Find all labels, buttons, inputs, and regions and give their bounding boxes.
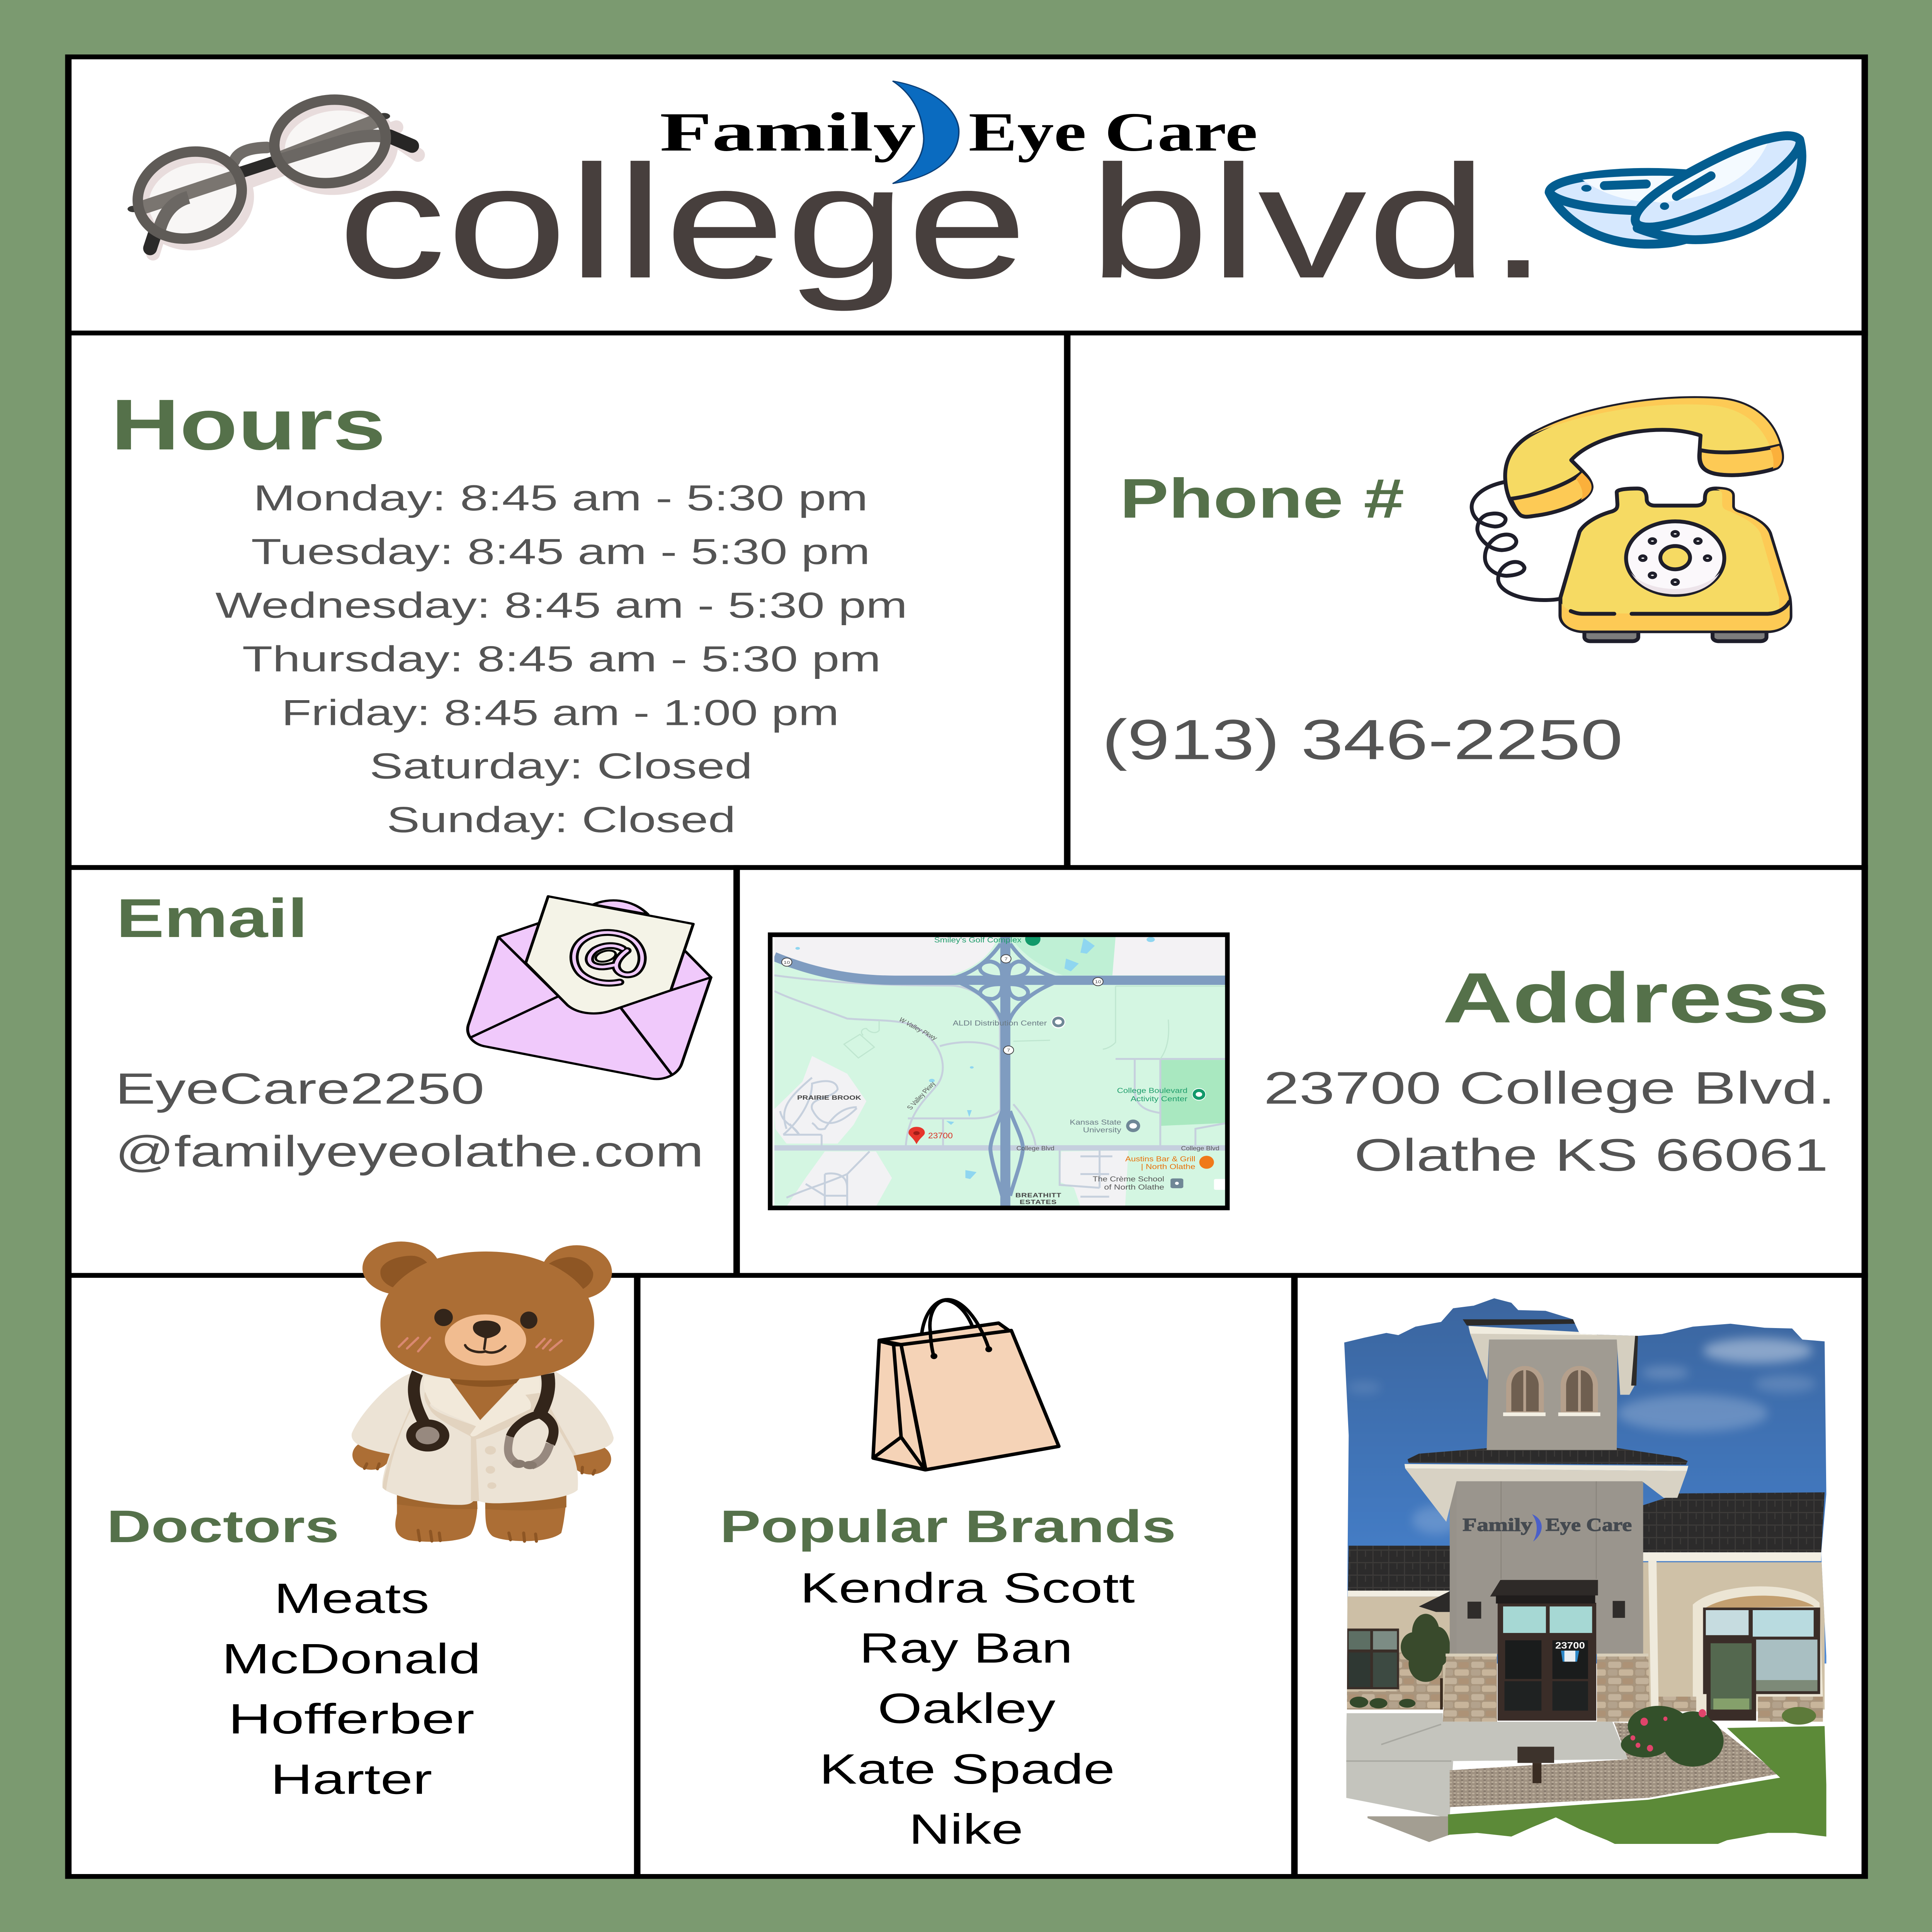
icon: contact lenses: [1549, 136, 1802, 244]
text: email address: EyeCare2250: [115, 1064, 485, 1113]
text: brand list: Oakley: [878, 1685, 1056, 1732]
map: 10: [1095, 979, 1101, 984]
heading: Popular Brands: Popular Brands: [720, 1501, 1176, 1552]
map: College Boulevard: [1117, 1087, 1187, 1095]
heading: Phone: Phone #: [1120, 468, 1404, 530]
text: street address: Olathe KS 66061: [1354, 1130, 1828, 1180]
map: College Blvd: [1017, 1145, 1054, 1151]
text: brand list: Kendra Scott: [800, 1565, 1135, 1612]
heading: Address: Address: [1442, 958, 1830, 1037]
map: BREATHITT: [1015, 1192, 1061, 1199]
heading: Email: Email: [116, 888, 308, 949]
panel: header: [68, 57, 1865, 333]
text: opening hours: Friday: 8:45 am - 1:00 pm: [282, 692, 839, 733]
photo: storefront: 23700: [1555, 1640, 1585, 1651]
text: brand list: Nike: [909, 1806, 1023, 1853]
map: 10: [784, 960, 790, 965]
map: PRAIRIE BROOK: [797, 1094, 861, 1101]
heading: Hours: Hours: [111, 384, 386, 465]
map: | North Olathe: [1141, 1163, 1196, 1171]
icon: shopping bag: [873, 1300, 1059, 1470]
text: opening hours: [215, 478, 907, 840]
text: phone number: (913) 346-2250: [1102, 708, 1623, 771]
photo: storefront: [1340, 1295, 1830, 1844]
text: email address: @familyeyeolathe.com: [115, 1127, 704, 1176]
map: Smiley's Golf Complex: [934, 935, 1022, 944]
text: brand list: [800, 1565, 1135, 1853]
map: College Blvd: [1181, 1145, 1219, 1151]
text: doctor list: [222, 1575, 481, 1803]
heading: Doctors: Doctors: [107, 1501, 339, 1552]
text: brand list: Ray Ban: [859, 1624, 1073, 1672]
map: [770, 932, 1227, 1208]
panel: doctors: [68, 1242, 637, 1876]
logo: Family Eye Care: Family: [660, 102, 916, 163]
map: 23700: [928, 1131, 953, 1140]
text: opening hours: Tuesday: 8:45 am - 5:30 pm: [251, 532, 870, 572]
text: opening hours: Wednesday: 8:45 am - 5:30 pm: [215, 585, 907, 626]
map: Activity Center: [1131, 1095, 1187, 1103]
text: doctor list: McDonald: [222, 1635, 481, 1682]
text: opening hours: Saturday: Closed: [369, 746, 752, 786]
map: The Crème School: [1093, 1175, 1164, 1183]
text: email address: [115, 1064, 704, 1176]
panel: email: [68, 867, 736, 1276]
map: Kansas State: [1070, 1118, 1121, 1126]
icon: envelope: [468, 896, 711, 1079]
map: ALDI Distribution Center: [953, 1019, 1047, 1027]
panel: popular brands: [637, 1276, 1294, 1876]
icon: teddy bear doctor: [352, 1242, 614, 1542]
panel: address: [736, 867, 1865, 1276]
text: opening hours: Sunday: Closed: [387, 799, 736, 840]
panel: building photo: [1294, 1276, 1865, 1876]
text: doctor list: Meats: [274, 1575, 429, 1622]
panel: hours: [68, 333, 1067, 867]
map: Austins Bar & Grill: [1125, 1155, 1196, 1163]
text: brand list: Kate Spade: [819, 1746, 1115, 1793]
icon: glasses: [128, 96, 418, 253]
logo: Family Eye Care: Eye Care: [968, 102, 1258, 163]
map: of North Olathe: [1104, 1183, 1164, 1191]
text: street address: 23700 College Blvd.: [1264, 1063, 1835, 1114]
map: 7: [1005, 956, 1008, 961]
map: W Valley Pkwy: [897, 1016, 939, 1041]
photo: storefront: Family: [1463, 1515, 1532, 1535]
map: S Valley Pkwy: [905, 1080, 937, 1111]
title: college blvd.: [337, 132, 1548, 313]
photo: storefront: Eye Care: [1546, 1515, 1632, 1535]
map: University: [1083, 1126, 1121, 1134]
text: doctor list: Hofferber: [228, 1696, 474, 1743]
text: street address: [1264, 1063, 1835, 1180]
panel: phone: [1067, 333, 1865, 867]
logo: Family Eye Care: [660, 81, 1258, 184]
icon: rotary telephone: [1472, 398, 1791, 641]
text: opening hours: Thursday: 8:45 am - 5:30 pm: [242, 639, 881, 679]
map: 7: [1007, 1048, 1010, 1053]
text: opening hours: Monday: 8:45 am - 5:30 pm: [253, 478, 868, 518]
map: ESTATES: [1020, 1199, 1056, 1205]
text: doctor list: Harter: [270, 1756, 432, 1803]
